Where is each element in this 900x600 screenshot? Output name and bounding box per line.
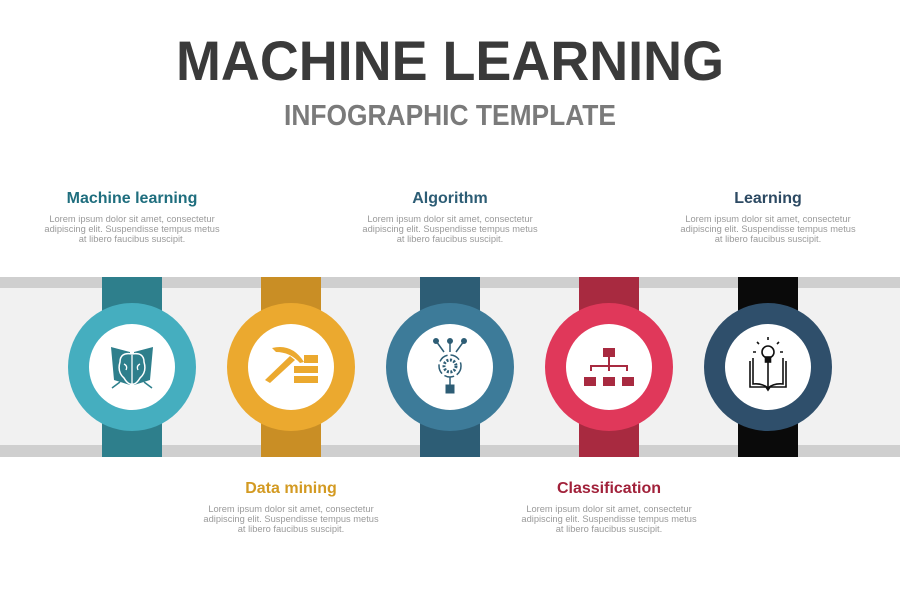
- text: algorithm: Lorem ipsum dolor sit amet, consectetur: [367, 214, 533, 224]
- text: algorithm: Algorithm: [412, 190, 488, 207]
- text: data mining: Lorem ipsum dolor sit amet, consectetur: [208, 504, 374, 514]
- text: machine learning: [44, 190, 220, 244]
- text: machine learning: at libero faucibus suscipit.: [79, 234, 185, 244]
- step 2: data mining: [227, 277, 355, 457]
- icon: book with bulb: [750, 337, 786, 390]
- text: data mining: adipiscing elit. Suspendisse tempus metus: [203, 514, 379, 524]
- subtitle: INFOGRAPHIC TEMPLATE: [284, 100, 616, 132]
- step 5: learning: [704, 277, 832, 457]
- text: learning: [680, 190, 856, 244]
- step 3: algorithm: [386, 277, 514, 457]
- text: algorithm: at libero faucibus suscipit.: [397, 234, 503, 244]
- text: algorithm: adipiscing elit. Suspendisse tempus metus: [362, 224, 538, 234]
- text: machine learning: adipiscing elit. Suspendisse tempus metus: [44, 224, 220, 234]
- text: classification: adipiscing elit. Suspendisse tempus metus: [521, 514, 697, 524]
- band background: [0, 277, 900, 457]
- icon: brain book: [111, 347, 153, 388]
- text: learning: adipiscing elit. Suspendisse tempus metus: [680, 224, 856, 234]
- icon: pickaxe and drawers: [265, 347, 318, 383]
- text: classification: Classification: [557, 480, 661, 497]
- text: classification: at libero faucibus suscipit.: [556, 524, 662, 534]
- text: machine learning: Machine learning: [67, 190, 197, 207]
- text: classification: [521, 480, 697, 534]
- icon: algorithm gear: [434, 338, 466, 393]
- text: learning: Lorem ipsum dolor sit amet, consectetur: [685, 214, 851, 224]
- text: learning: Learning: [734, 190, 802, 207]
- title: MACHINE LEARNING: [176, 29, 724, 92]
- text: learning: at libero faucibus suscipit.: [715, 234, 821, 244]
- text: algorithm: [362, 190, 538, 244]
- text: machine learning: Lorem ipsum dolor sit amet, consectetur: [49, 214, 215, 224]
- step 1: machine learning: [68, 277, 196, 457]
- text: classification: Lorem ipsum dolor sit amet, consectetur: [526, 504, 692, 514]
- step 4: classification: [545, 277, 673, 457]
- text: data mining: Data mining: [245, 480, 337, 497]
- text: data mining: [203, 480, 379, 534]
- text: data mining: at libero faucibus suscipit.: [238, 524, 344, 534]
- icon: hierarchy: [584, 348, 634, 386]
